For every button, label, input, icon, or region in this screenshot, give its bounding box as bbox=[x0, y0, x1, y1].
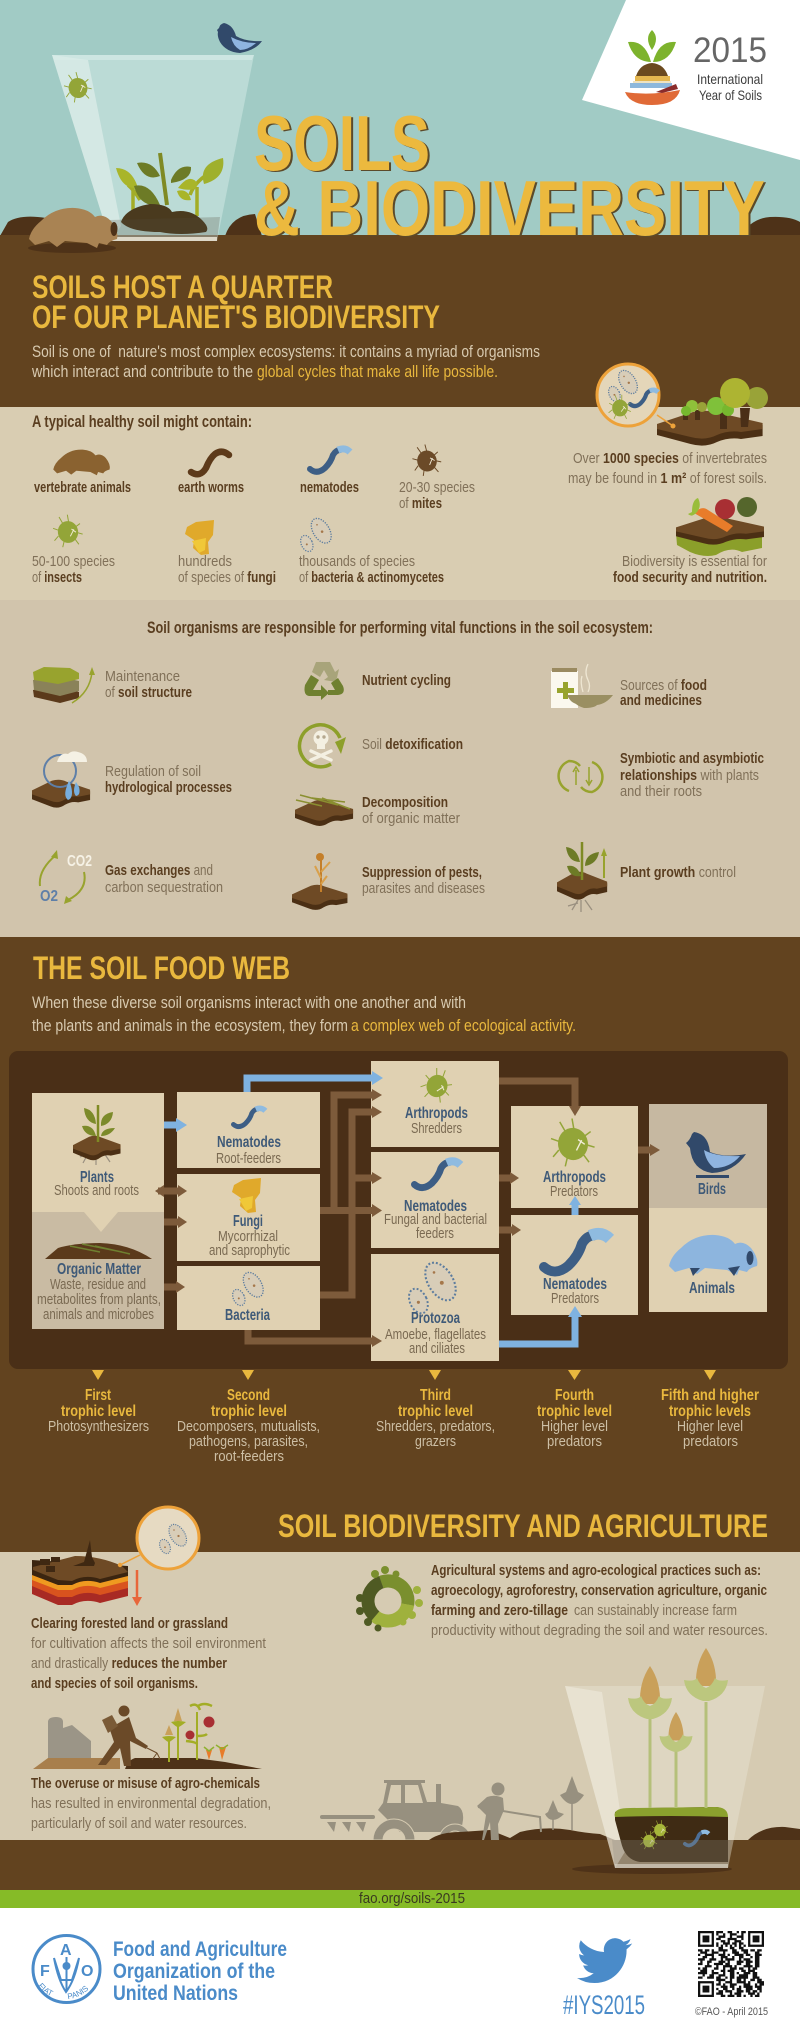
box: birds bbox=[649, 1104, 767, 1208]
text: nutrient cycling: Nutrient cycling bbox=[362, 672, 451, 689]
label: vertebrate animals: vertebrate animals bbox=[34, 479, 131, 496]
text: suppression: parasites and diseases bbox=[362, 880, 485, 897]
text: soil intro: global cycles that make all life possible. bbox=[257, 362, 498, 381]
label: bacteria: of bacteria & actinomycetes bbox=[299, 569, 444, 586]
barn bbox=[48, 1717, 91, 1758]
box: root-feeding nematodes: Nematodes bbox=[217, 1134, 281, 1151]
icon: hydrological cycle bbox=[32, 751, 90, 808]
text: decomposition bbox=[362, 794, 460, 827]
text: gas exchanges: Gas exchanges and bbox=[105, 862, 213, 879]
text: international year of soils: International bbox=[697, 71, 763, 87]
text: soil intro bbox=[31, 342, 540, 381]
icon: nematode bbox=[310, 449, 350, 472]
text: soil structure bbox=[105, 668, 192, 701]
text: soil intro: Soil is one of nature's most complex ecosystems: it contains a myriad of organisms bbox=[32, 342, 540, 361]
icon: recycling bbox=[304, 662, 344, 700]
heading: soil food web: THE SOIL FOOD WEB bbox=[33, 950, 290, 986]
text: international year of soils: Year of Soils bbox=[699, 87, 762, 103]
text: fao name: United Nations bbox=[113, 1982, 238, 2005]
icon: year of soils logo bbox=[625, 30, 680, 105]
label: first trophic level bbox=[48, 1387, 149, 1435]
icon: earth worm bbox=[191, 452, 229, 474]
heading: soils host a quarter bbox=[32, 269, 440, 335]
box: protozoa: Amoebe, flagellates bbox=[385, 1327, 486, 1343]
box: plants: Shoots and roots bbox=[54, 1183, 139, 1199]
box: root-feeding nematodes bbox=[177, 1092, 320, 1168]
box: nematode predators: Predators bbox=[551, 1291, 599, 1307]
icon: bird on glass bbox=[217, 23, 262, 53]
box: bacteria: Bacteria bbox=[225, 1307, 270, 1324]
text: decomposition: of organic matter bbox=[362, 810, 460, 827]
icon: food on soil bbox=[676, 497, 764, 556]
box: plants bbox=[32, 1093, 164, 1212]
box: fungal and bacterial feeding nematodes: Fungal and bacterial bbox=[384, 1212, 487, 1228]
box: arthropod predators bbox=[511, 1106, 638, 1208]
sprouts bbox=[116, 153, 223, 216]
icon: fao logo: O bbox=[81, 1963, 93, 1980]
label: fourth trophic level: Fourth bbox=[555, 1387, 594, 1404]
panel: soil food web bbox=[0, 937, 800, 1552]
text: food security: Biodiversity is essential for bbox=[622, 553, 767, 570]
label: fifth and higher trophic levels: predators bbox=[683, 1434, 738, 1450]
box: fungi bbox=[177, 1174, 320, 1261]
icon: qr code bbox=[698, 1932, 764, 1996]
text: copyright: ©FAO - April 2015 bbox=[695, 2006, 768, 2018]
soil creatures bbox=[651, 1820, 668, 1838]
panel: url bar bbox=[0, 1890, 800, 1908]
label: fungi: hundreds bbox=[178, 553, 232, 570]
text: hydrological bbox=[105, 763, 232, 796]
arrows: brown energy flows bbox=[155, 1081, 660, 1347]
text: symbiotic bbox=[620, 750, 764, 800]
label: third trophic level: grazers bbox=[415, 1434, 456, 1450]
decorative ground bumps bbox=[0, 214, 800, 236]
text: hydrological: hydrological processes bbox=[105, 779, 232, 796]
label: fourth trophic level: trophic level bbox=[537, 1403, 612, 1420]
crops bbox=[169, 1712, 197, 1762]
text: url: fao.org/soils-2015 bbox=[359, 1890, 465, 1907]
box: protozoa bbox=[371, 1254, 499, 1361]
label: fifth and higher trophic levels: Fifth and higher bbox=[661, 1387, 759, 1404]
box: fungi: and saprophytic bbox=[209, 1243, 290, 1259]
text: clearing land: and drastically reduces the number bbox=[31, 1655, 227, 1672]
icon: twitter bird bbox=[577, 1938, 632, 1983]
icon: fao logo: PANIS bbox=[68, 1986, 88, 1999]
label: second trophic level: Decomposers, mutualists, bbox=[177, 1419, 320, 1435]
text: decomposition: Decomposition bbox=[362, 794, 448, 811]
icon: fao logo: FIAT bbox=[39, 1982, 54, 1996]
label: second trophic level: root-feeders bbox=[214, 1449, 284, 1465]
box: plants: Plants bbox=[80, 1169, 114, 1186]
box: organic matter bbox=[32, 1212, 164, 1329]
box: protozoa: Protozoa bbox=[411, 1310, 460, 1327]
text: food web intro: the plants and animals in the ecosystem, they form bbox=[32, 1016, 348, 1035]
text: suppression bbox=[362, 864, 485, 897]
text: symbiotic: Symbiotic and asymbiotic bbox=[620, 750, 764, 767]
text: agro-chemicals: particularly of soil and water resources. bbox=[31, 1815, 247, 1832]
text: soil intro: which interact and contribute to the bbox=[31, 362, 253, 381]
label: fifth and higher trophic levels: Higher level bbox=[677, 1419, 743, 1435]
icon: mole on ground bbox=[28, 208, 118, 253]
panel: vital functions bbox=[0, 600, 800, 937]
text: agro-chemicals bbox=[31, 1775, 271, 1832]
icon: gas exchange bbox=[40, 850, 92, 905]
panel: typical healthy soil bbox=[0, 364, 800, 600]
label: fourth trophic level bbox=[537, 1387, 612, 1450]
text: food web intro: a complex web of ecological activity. bbox=[351, 1016, 576, 1035]
title: SOILS bbox=[254, 99, 430, 187]
label: fifth and higher trophic levels bbox=[661, 1387, 759, 1450]
icon: food and medicines bbox=[551, 664, 613, 708]
text: agro-ecological practices: can sustainably increase farm bbox=[574, 1602, 737, 1619]
label: fourth trophic level: predators bbox=[547, 1434, 602, 1450]
box: root-feeding nematodes: Root-feeders bbox=[216, 1151, 281, 1167]
label: third trophic level bbox=[376, 1387, 495, 1450]
text: gas exchanges bbox=[105, 862, 223, 896]
label: first trophic level: trophic level bbox=[61, 1403, 136, 1420]
box: bacteria bbox=[177, 1266, 320, 1330]
text: food and medicines: and medicines bbox=[620, 692, 702, 709]
soil layers in glass bbox=[615, 1807, 728, 1862]
person bbox=[98, 1717, 148, 1766]
icon: bacteria bbox=[298, 515, 335, 554]
panel: hero sky bbox=[0, 0, 800, 236]
text: food web intro: When these diverse soil organisms interact with one another and with bbox=[32, 993, 466, 1012]
box: animals bbox=[649, 1208, 767, 1312]
label: mites: 20-30 species bbox=[399, 479, 475, 496]
icon: farmer spraying agro-chemicals bbox=[33, 1704, 262, 1769]
panel: bottom soil bbox=[0, 1840, 800, 1890]
icon: pest suppression bbox=[292, 853, 347, 910]
label: second trophic level: Second bbox=[227, 1387, 270, 1404]
text: soil structure: of soil structure bbox=[105, 684, 192, 701]
icon: tractor bbox=[320, 1780, 471, 1840]
text: gas exchanges: carbon sequestration bbox=[105, 879, 223, 896]
text: soil structure: Maintenance bbox=[105, 668, 180, 685]
icon: mite on glass bbox=[61, 69, 94, 104]
icon: gas exchange: CO2 bbox=[67, 853, 92, 870]
label: fifth and higher trophic levels: trophic levels bbox=[669, 1403, 751, 1420]
markers: trophic level triangles bbox=[92, 1370, 716, 1380]
small corn plants bbox=[545, 1776, 584, 1830]
text: fao name bbox=[113, 1938, 287, 2005]
decorative soil mounds bbox=[429, 1827, 800, 1840]
icon: farmer with hoe bbox=[477, 1776, 584, 1840]
icon: glass with corn bbox=[565, 1648, 765, 1874]
box: fungi: Fungi bbox=[233, 1213, 263, 1230]
text: clearing land bbox=[31, 1615, 267, 1692]
box: arthropod shredders: Arthropods bbox=[405, 1105, 468, 1122]
icon: glass with plants bbox=[52, 55, 254, 241]
panel: soil ground bbox=[0, 235, 800, 407]
box: fungi: Mycorrhizal bbox=[218, 1229, 278, 1245]
box: arthropod predators: Arthropods bbox=[543, 1169, 606, 1186]
box: organic matter: Organic Matter bbox=[57, 1261, 141, 1278]
label: insects: of insects bbox=[32, 569, 82, 586]
icon: agro-ecology wreath bbox=[356, 1566, 423, 1632]
label: second trophic level: trophic level bbox=[211, 1403, 287, 1420]
heading: typical soil: A typical healthy soil might contain: bbox=[32, 412, 252, 431]
soil in glass bbox=[121, 204, 207, 234]
label: mites bbox=[399, 479, 475, 512]
label: second trophic level bbox=[177, 1387, 320, 1465]
label: mites: of mites bbox=[399, 495, 442, 512]
icon: fungi bbox=[185, 520, 214, 555]
text: food and medicines: Sources of food bbox=[620, 677, 707, 694]
icon: plant growth bbox=[557, 842, 607, 912]
label: bacteria: thousands of species bbox=[299, 553, 415, 570]
box: fungal and bacterial feeding nematodes bbox=[371, 1152, 499, 1248]
box: birds: Birds bbox=[698, 1181, 726, 1198]
icon: mole brown bbox=[53, 450, 110, 475]
label: second trophic level: pathogens, parasites, bbox=[189, 1434, 308, 1450]
box: nematode predators: Nematodes bbox=[543, 1276, 607, 1293]
label: fungi: of species of fungi bbox=[178, 569, 276, 586]
text: symbiotic: and their roots bbox=[620, 783, 702, 800]
label: third trophic level: Shredders, predators, bbox=[376, 1419, 495, 1435]
panel: agriculture bbox=[0, 1507, 800, 1840]
box: organic matter: metabolites from plants, bbox=[37, 1292, 161, 1308]
text: food web intro bbox=[32, 993, 576, 1035]
label: fungi bbox=[178, 553, 276, 586]
icon: decomposition bbox=[295, 795, 353, 826]
text: food security bbox=[613, 553, 767, 586]
title bbox=[254, 99, 765, 252]
text: international year of soils bbox=[697, 71, 763, 103]
box: nematode predators bbox=[511, 1215, 638, 1315]
label: nematodes: nematodes bbox=[300, 479, 359, 496]
box: arthropod predators: Predators bbox=[550, 1184, 598, 1200]
label: earth worms: earth worms bbox=[178, 479, 244, 496]
text: 1000 species: Over 1000 species of invertebrates bbox=[573, 450, 767, 467]
label: third trophic level: trophic level bbox=[398, 1403, 473, 1420]
box: fungal and bacterial feeding nematodes: Nematodes bbox=[404, 1198, 467, 1215]
label: third trophic level: Third bbox=[420, 1387, 451, 1404]
icon: symbiotic cycle bbox=[559, 761, 602, 792]
text: 1000 species: may be found in 1 m² of forest soils. bbox=[568, 470, 767, 487]
label: first trophic level: Photosynthesizers bbox=[48, 1419, 149, 1435]
text: 1000 species bbox=[568, 450, 767, 487]
panel: footer bbox=[32, 1931, 768, 2020]
icon: fao logo: A bbox=[60, 1942, 72, 1959]
text: agro-ecological practices: farming and zero-tillage bbox=[431, 1602, 568, 1619]
box: fungal and bacterial feeding nematodes: feeders bbox=[416, 1226, 454, 1242]
box: arthropod shredders: Shredders bbox=[411, 1121, 462, 1137]
icon: green insect bbox=[50, 513, 84, 548]
text: fao name: Organization of the bbox=[113, 1960, 275, 1983]
chart: food web diagram bbox=[9, 1051, 788, 1369]
box: organic matter: Waste, residue and bbox=[50, 1277, 146, 1293]
box: arthropod shredders bbox=[371, 1061, 499, 1147]
icon: detoxification bbox=[300, 725, 346, 767]
text: plant growth: Plant growth control bbox=[620, 864, 736, 881]
text: suppression: Suppression of pests, bbox=[362, 864, 482, 881]
text: fao name: Food and Agriculture bbox=[113, 1938, 287, 1961]
text: hydrological: Regulation of soil bbox=[105, 763, 201, 780]
label: insects bbox=[32, 553, 115, 586]
icon: gas exchange: O2 bbox=[40, 888, 58, 905]
text: agro-chemicals: has resulted in environmental degradation, bbox=[31, 1795, 271, 1812]
heading: soils host a quarter: OF OUR PLANET'S BIODIVERSITY bbox=[32, 299, 440, 335]
year of soils badge bbox=[582, 0, 800, 160]
text: clearing land: and species of soil organisms. bbox=[31, 1675, 198, 1692]
text: symbiotic: relationships with plants bbox=[620, 767, 759, 784]
box: protozoa: and ciliates bbox=[409, 1341, 465, 1357]
text: year: 2015 bbox=[693, 31, 767, 70]
icon: forest soil with magnifier bbox=[597, 364, 768, 446]
icon: fao logo: F bbox=[40, 1963, 50, 1980]
text: clearing land: Clearing forested land or grassland bbox=[31, 1615, 228, 1632]
text: hashtag: #IYS2015 bbox=[563, 1990, 645, 2020]
icon: brown mite bbox=[409, 442, 444, 478]
corn stalks bbox=[650, 1702, 706, 1808]
heading: soils host a quarter: SOILS HOST A QUARTER bbox=[32, 269, 333, 305]
text: food and medicines bbox=[620, 677, 707, 709]
icon: fao logo bbox=[32, 1934, 102, 2004]
arrows: blue energy flows bbox=[164, 1071, 582, 1344]
icon: soil structure bbox=[33, 667, 95, 703]
label: first trophic level: First bbox=[85, 1387, 112, 1404]
box: animals: Animals bbox=[689, 1280, 735, 1297]
label: fourth trophic level: Higher level bbox=[541, 1419, 608, 1435]
text: clearing land: for cultivation affects the soil environment bbox=[31, 1635, 267, 1652]
text: agro-chemicals: The overuse or misuse of agro-chemicals bbox=[31, 1775, 260, 1792]
label: bacteria bbox=[299, 553, 444, 586]
text: detoxification: Soil detoxification bbox=[362, 736, 463, 753]
box: organic matter: animals and microbes bbox=[43, 1307, 154, 1323]
label: insects: 50-100 species bbox=[32, 553, 115, 570]
text: agro-ecological practices bbox=[431, 1562, 768, 1639]
icon: cleared land with magnifier bbox=[32, 1507, 199, 1606]
